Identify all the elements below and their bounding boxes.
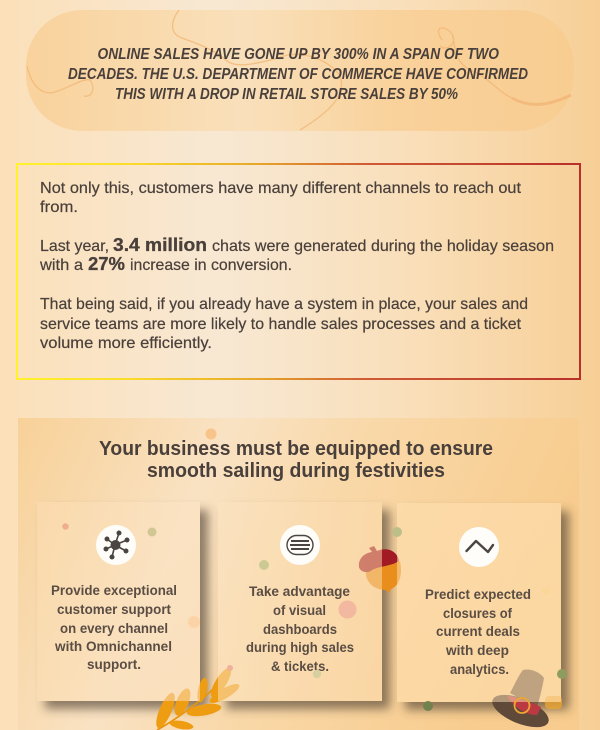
card text xyxy=(246,584,354,674)
heading: equipped: smooth sailing during festivities xyxy=(147,460,445,482)
icon: pilgrim hat xyxy=(488,669,562,730)
card text: support. xyxy=(87,657,141,672)
icon: trend line xyxy=(459,527,499,567)
paragraph: chat statistics: with a xyxy=(39,257,83,274)
paragraph: system in place xyxy=(40,296,528,352)
card text: Predict expected xyxy=(425,587,531,602)
paragraph: channels: Not only this, customers have many different channels to reach out xyxy=(40,180,522,197)
card text: closures of xyxy=(443,606,512,621)
paragraph: chat statistics: increase in conversion. xyxy=(130,257,292,274)
decorative dots xyxy=(62,428,567,711)
icon: hat buckle xyxy=(514,698,530,713)
card text: dashboards xyxy=(263,622,337,637)
paragraph: chat statistics: 3.4 million xyxy=(113,235,207,255)
card text: with deep xyxy=(445,643,509,658)
card text: on every channel xyxy=(60,621,168,636)
card text: during high sales xyxy=(246,640,354,655)
paragraph: system in place: volume more efficiently. xyxy=(40,335,212,352)
paragraph: chat statistics: chats were generated during the holiday season xyxy=(212,238,554,255)
card text: of visual xyxy=(273,603,326,618)
paragraph: channels: from. xyxy=(40,199,78,216)
heading: equipped xyxy=(99,438,493,482)
icon: dashboard list xyxy=(280,525,320,565)
card text: with Omnichannel xyxy=(54,639,172,654)
icon: network hub xyxy=(96,525,136,565)
paragraph: chat statistics: 27% xyxy=(88,254,125,274)
card text: Take advantage xyxy=(249,584,350,599)
paragraph: system in place: That being said, if you already have a system in place, your sales and xyxy=(40,296,528,313)
panel: online sales banner xyxy=(26,10,574,131)
icon: acorn xyxy=(359,546,401,593)
paragraph: system in place: service teams are more likely to handle sales processes and a ticket xyxy=(40,316,522,333)
paragraph: chat statistics: Last year, xyxy=(40,238,109,255)
panel: channels text box xyxy=(17,164,580,379)
icon: autumn leaf branch xyxy=(153,665,242,730)
card text: customer support xyxy=(57,602,171,617)
panel: equipped section background xyxy=(18,418,579,730)
paragraph: chat statistics xyxy=(39,235,554,274)
card: visual dashboards xyxy=(218,502,382,701)
banner text: DECADES. THE U.S. DEPARTMENT OF COMMERCE HAVE CONFIRMED xyxy=(68,66,528,83)
card text: analytics. xyxy=(450,662,509,677)
banner text xyxy=(68,46,528,103)
card: omnichannel support xyxy=(37,502,200,701)
paragraph: channels xyxy=(40,180,522,216)
card text: current deals xyxy=(436,624,520,639)
card text: & tickets. xyxy=(271,659,329,674)
banner text: THIS WITH A DROP IN RETAIL STORE SALES BY 50% xyxy=(115,86,458,103)
card text: Provide exceptional xyxy=(51,583,177,598)
banner text: ONLINE SALES HAVE GONE UP BY 300% IN A SPAN OF TWO xyxy=(98,46,499,63)
decorative swirls xyxy=(27,10,571,130)
heading: equipped: Your business must be equipped to ensure xyxy=(99,438,493,460)
card: deep analytics xyxy=(397,503,561,702)
card text xyxy=(425,587,531,677)
card text xyxy=(51,583,177,672)
card shadows xyxy=(37,502,561,702)
